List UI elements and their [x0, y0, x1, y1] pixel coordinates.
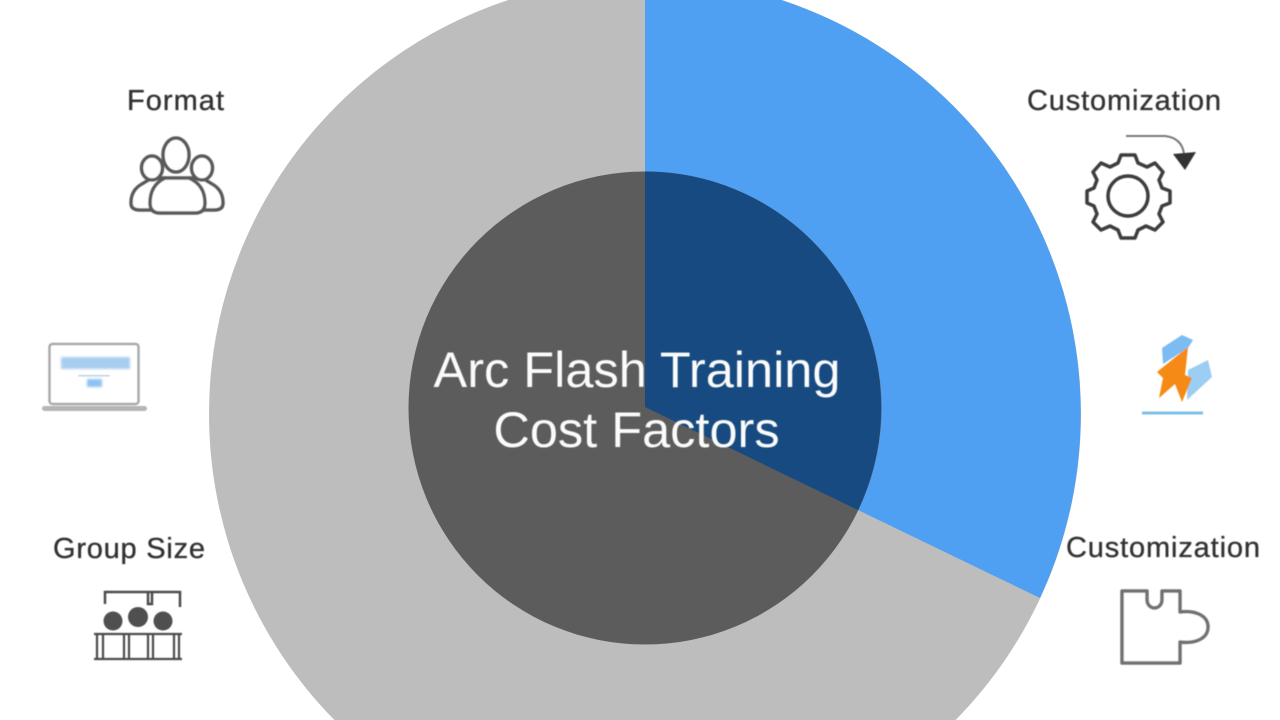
icon: puzzle piece: [1122, 591, 1208, 663]
icon: laptop with chart text: [42, 344, 147, 411]
icon: lightning bolt: [1142, 335, 1212, 414]
icon: group seated: [94, 592, 182, 659]
inner circle: dark gray: [408, 172, 882, 644]
label: Group Size: Group Size: [53, 533, 205, 565]
label: Format: Format: [127, 85, 224, 117]
outer segment: blue: [645, 0, 1081, 598]
inner segment: dark blue: [645, 172, 881, 510]
outer segment: gray: [209, 0, 1081, 720]
icon: people group: [131, 138, 223, 213]
icon: gear with arrow: [1087, 136, 1196, 238]
center title: [434, 341, 840, 458]
center title: Arc Flash Training: [434, 341, 840, 398]
label: Customization bottom: Customization: [1066, 532, 1260, 564]
label: Customization top: Customization: [1027, 85, 1221, 117]
donut chart: [209, 0, 1081, 720]
screen content: [61, 357, 130, 369]
center title: Cost Factors: [493, 401, 780, 458]
